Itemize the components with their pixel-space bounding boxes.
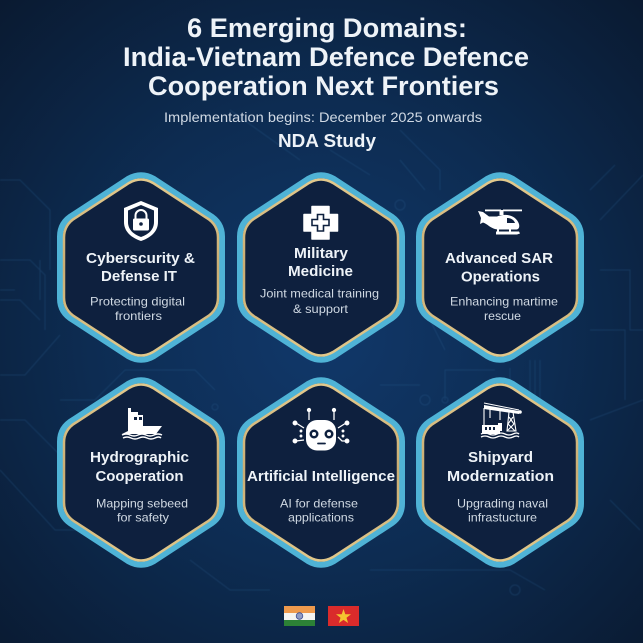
icon: robot head xyxy=(293,408,349,450)
heading: Cooperation xyxy=(96,469,184,485)
description: infrastucture xyxy=(468,510,537,524)
heading xyxy=(288,246,353,280)
heading: Operations xyxy=(461,270,540,286)
title: India-Vietnam Defence Defence xyxy=(123,42,529,72)
heading: Medicine xyxy=(288,264,353,280)
panel: Hydrographic Cooperation xyxy=(60,380,222,565)
description xyxy=(450,294,558,323)
description: AI for defense xyxy=(280,496,358,510)
description xyxy=(280,496,358,524)
source label: NDA Study xyxy=(278,131,376,151)
heading xyxy=(86,251,196,285)
heading: Hydrographic xyxy=(90,450,189,466)
icon: medical cross xyxy=(304,206,338,239)
panel: Advanced SAR Operations xyxy=(419,175,581,360)
description xyxy=(90,294,185,323)
description: Protecting digital xyxy=(90,294,185,308)
heading: Artificial Intelligence xyxy=(247,469,395,485)
description: Joint medical training xyxy=(260,286,379,300)
icon: shield with padlock xyxy=(124,201,158,241)
description: Upgrading naval xyxy=(457,496,548,510)
title: Cooperation Next Frontiers xyxy=(148,71,499,101)
description: Mapping sebeed xyxy=(96,496,188,510)
description: rescue xyxy=(484,309,521,323)
description xyxy=(260,286,379,316)
heading: Advanced SAR xyxy=(445,251,554,267)
icon: shipyard crane xyxy=(481,403,522,438)
panel: Artificial Intelligence xyxy=(240,380,402,565)
heading: Military xyxy=(294,246,348,262)
heading: Modernızation xyxy=(447,469,554,485)
heading xyxy=(445,251,554,286)
description xyxy=(96,496,188,524)
heading: Cyberscurity & xyxy=(86,251,196,267)
heading: Defense IT xyxy=(101,269,177,285)
description: frontiers xyxy=(115,309,162,323)
icon: survey ship xyxy=(122,408,162,439)
description: Enhancing martime xyxy=(450,294,558,308)
panel: Military Medicine xyxy=(240,175,402,360)
description: & support xyxy=(293,302,349,316)
heading: Shipyard xyxy=(468,450,533,466)
icon: flag of Vietnam xyxy=(328,606,359,626)
heading xyxy=(447,450,554,485)
heading xyxy=(90,450,189,485)
icon: flag of India xyxy=(284,606,315,626)
icon: helicopter xyxy=(478,210,522,234)
description: applications xyxy=(288,510,354,524)
title xyxy=(123,13,529,101)
description xyxy=(457,496,548,524)
description: for safety xyxy=(117,510,169,524)
subtitle: Implementation begins: December 2025 onwards xyxy=(164,109,482,125)
title: 6 Emerging Domains: xyxy=(187,13,467,43)
panel: Cybersecurity and Defense IT xyxy=(60,175,222,360)
panel: Shipyard Modernization xyxy=(419,380,581,565)
